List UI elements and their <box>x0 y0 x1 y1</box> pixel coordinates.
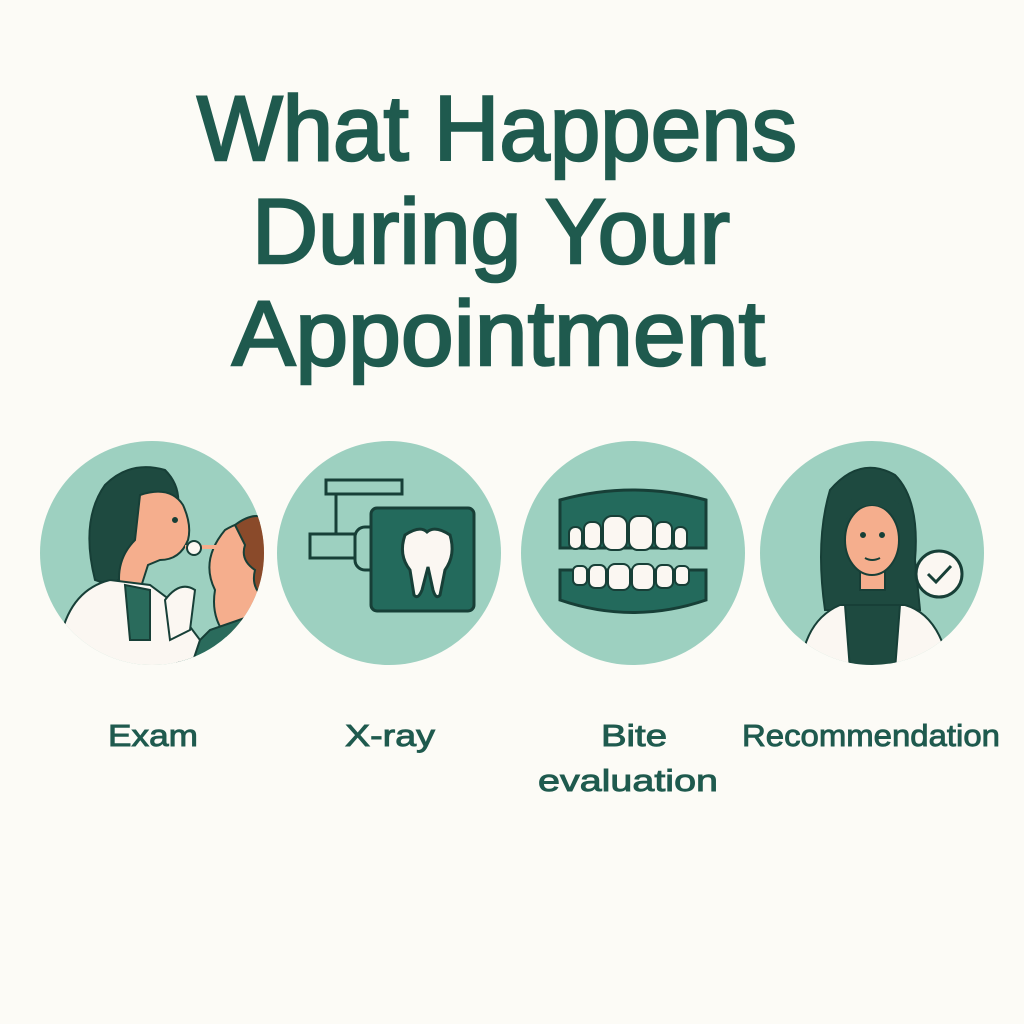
icon: exam <box>40 441 268 680</box>
title <box>197 78 797 385</box>
icon: x-ray <box>277 441 501 665</box>
labels: Exam <box>108 718 198 753</box>
labels: Bite <box>601 718 667 753</box>
labels: X-ray <box>345 718 436 753</box>
title: Appointment <box>232 283 765 385</box>
labels: Recommendation <box>742 718 1000 753</box>
title: During Your <box>252 181 730 283</box>
icon: bite evaluation <box>521 441 745 665</box>
title: What Happens <box>197 78 797 180</box>
icon: recommendation <box>760 441 984 670</box>
labels <box>108 718 1000 798</box>
labels: evaluation <box>538 763 718 798</box>
